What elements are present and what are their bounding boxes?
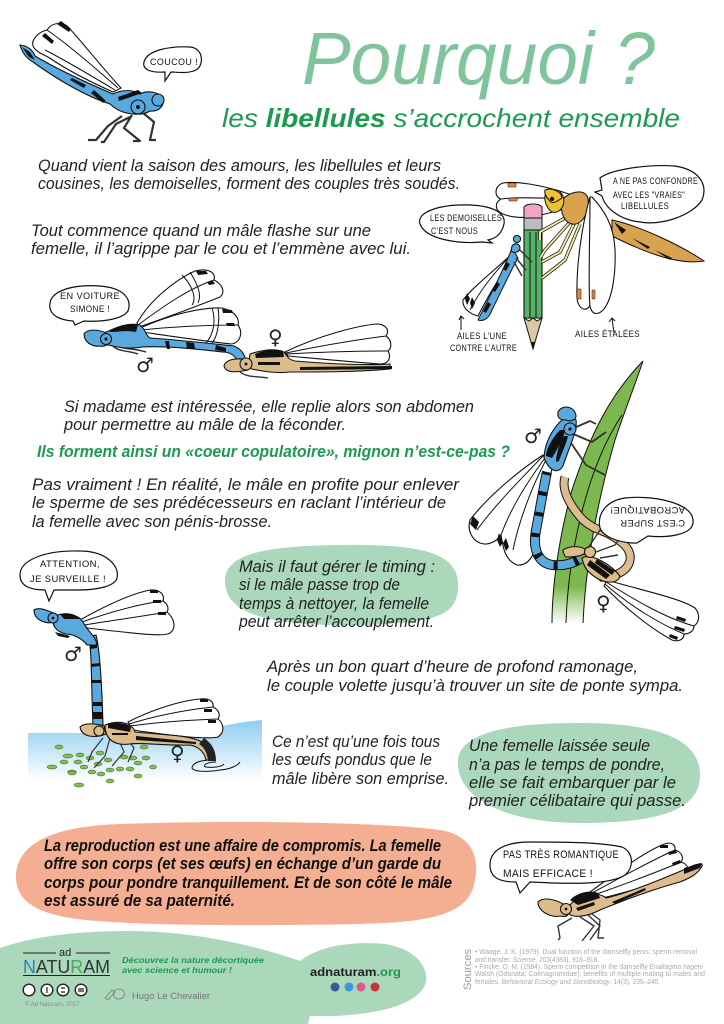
symbol: female: ♀	[596, 591, 611, 615]
green bubble: timing: si le mâle passe trop de	[239, 576, 400, 594]
label: ailes etalees	[575, 318, 640, 339]
speech bubble: vraies libellules: A NE PAS CONFONDRE	[613, 176, 698, 186]
tagline: Découvrez la nature décortiquée	[122, 955, 264, 965]
speech bubble: coucou: COUCOU !	[150, 57, 198, 67]
illustration: blue damselfly saying coucou	[20, 21, 201, 142]
green statement: Ils forment ainsi un «coeur copulatoire», mignon n’est-ce-pas ?	[37, 443, 510, 461]
title: Pourquoi ?	[302, 17, 655, 100]
text: female interested	[63, 398, 474, 434]
symbol: male: ♂	[64, 642, 82, 666]
orange conclusion panel: offre son corps (et ses œufs) en échange d’un garde du	[44, 855, 441, 873]
speech bubble: vraies libellules	[595, 166, 704, 223]
tagline: avec science et humour !	[122, 965, 232, 975]
female wings	[604, 580, 699, 641]
tagline	[122, 955, 264, 975]
licence icons	[23, 984, 87, 996]
speech bubble: pas tres romantique	[490, 842, 631, 893]
text: first encounter: Tout commence quand un mâle flashe sur une	[31, 222, 371, 240]
sources list: females. Behavioral Ecology and Sociobiology, 14(3), 235–240.	[475, 977, 660, 986]
text: eggs laid: mâle libère son emprise.	[272, 770, 449, 788]
speech bubble: pas tres romantique: PAS TRÈS ROMANTIQUE	[503, 848, 619, 861]
symbol: male: ♂	[524, 424, 542, 448]
pencil	[524, 204, 542, 349]
speech bubble: en voiture simone: EN VOITURE	[60, 291, 120, 301]
sources list: Walsh (Odonata: Coenagrionidae): benefits of multiple mating to males and	[475, 969, 705, 978]
male abdomen up	[88, 635, 103, 725]
text: eggs laid: Ce n’est qu’une fois tous	[272, 733, 440, 751]
text: quarter of an hour: le couple volette jusqu’à trouver un site de ponte sympa.	[267, 677, 683, 695]
intro text	[38, 157, 460, 193]
female wings	[128, 699, 223, 738]
green bubble: single female: premier célibataire qui passe.	[468, 792, 686, 810]
speech bubble upside down: super acrobatique: C’EST SUPER	[620, 518, 685, 528]
label: ailes l'une contre l'autre: CONTRE L’AUTRE	[450, 343, 517, 353]
orange conclusion panel: est assuré de sa paternité.	[44, 892, 235, 910]
sources list: • Waage, J. K. (1979). Dual function of the damselfly penis: sperm removal	[475, 947, 697, 956]
text: first encounter	[31, 222, 411, 258]
speech bubble upside down: super acrobatique: ACROBATIQUE!	[610, 505, 685, 515]
text: sperm removal: Pas vraiment ! En réalité, le mâle en profite pour enlever	[32, 476, 461, 494]
speech bubble: demoiselles: LES DEMOISELLES	[430, 213, 502, 223]
illustration: female dragonfly with speech bubble	[490, 842, 702, 941]
green bubble: timing: Mais il faut gérer le timing :	[239, 558, 435, 576]
speech bubble: attention: JE SURVEILLE !	[30, 574, 106, 584]
copyright: © Ad Naturam, 2017	[25, 1001, 80, 1008]
sources list: • Fincke, O. M. (1984). Sperm competition in the damselfly Enallagma hageni	[475, 962, 703, 971]
logo: ad naturam: ad	[59, 947, 71, 959]
text: sperm removal: la femelle avec son pénis-brosse.	[32, 513, 272, 531]
speech bubble: pas tres romantique: MAIS EFFICACE !	[503, 868, 593, 880]
male abdomen	[535, 472, 580, 565]
illustration: guarding male and laying female	[20, 551, 262, 787]
water	[28, 720, 262, 781]
text: quarter of an hour: Après un bon quart d’heure de profond ramonage,	[266, 658, 638, 676]
website: adnaturam .org	[310, 965, 401, 979]
symbol: male: ♂	[136, 353, 154, 377]
orange conclusion panel	[16, 822, 476, 925]
small blue damselfly	[463, 252, 515, 316]
text: quarter of an hour	[266, 658, 683, 695]
green bubble: single female: n’a pas le temps de pondre,	[469, 756, 665, 774]
logo: ad naturam: NATURAM	[23, 957, 110, 977]
speech bubble: en voiture simone	[50, 286, 129, 325]
speech bubble: demoiselles	[420, 205, 504, 243]
illustration: copulatory heart on a leaf	[469, 361, 699, 641]
speech bubble: en voiture simone: SIMONE !	[70, 304, 110, 314]
symbol: female: ♀	[268, 325, 283, 349]
text: sperm removal	[32, 476, 461, 531]
green bubble: single female: Une femelle laissée seule	[469, 737, 650, 755]
text: eggs laid	[272, 733, 449, 788]
male wings	[469, 455, 552, 565]
green bubble: timing	[225, 545, 458, 631]
text: first encounter: femelle, il l’agrippe par le cou et l’emmène avec lui.	[31, 240, 411, 258]
intro text: Quand vient la saison des amours, les libellules et leurs	[38, 157, 441, 175]
speech bubble: vraies libellules: AVEC LES "VRAIES"	[613, 190, 685, 200]
author credit: Hugo Le Chevalier	[132, 991, 210, 1001]
green bubble: timing: peut arrêter l’accouplement.	[238, 613, 434, 631]
intro text: cousines, les demoiselles, forment des couples très soudés.	[38, 175, 460, 193]
speech bubble: attention	[20, 551, 117, 601]
eggs	[47, 745, 156, 787]
speech bubble upside down: super acrobatique	[599, 497, 693, 543]
speech bubble: attention: ATTENTION,	[40, 559, 100, 569]
female body	[105, 722, 212, 760]
label: ailes etalees: AILES ÉTALÉES	[575, 329, 640, 339]
speech bubble: coucou	[144, 47, 201, 81]
male wings	[80, 590, 174, 635]
leaf	[552, 361, 643, 623]
ripples	[192, 760, 240, 771]
male thorax and head	[544, 415, 576, 471]
orange conclusion panel: La reproduction est une affaire de compromis. La femelle	[44, 837, 441, 855]
orange conclusion panel: corps pour pondre tranquillement. Et de son côté le mâle	[44, 874, 452, 892]
illustration: male carrying female by the neck	[84, 270, 246, 377]
sources heading: Sources	[462, 948, 474, 990]
green bubble: single female	[458, 723, 700, 823]
sources list: and transfer. Science, 203(4383), 916–918.	[475, 955, 599, 964]
footer background	[0, 931, 426, 1024]
text: sperm removal: le sperme de ses prédécesseurs en raclant l’intérieur de	[32, 494, 446, 512]
speech bubble: demoiselles: C’EST NOUS	[431, 226, 478, 236]
social icons	[330, 982, 380, 992]
female legs	[88, 736, 134, 768]
logo: ad naturam	[23, 947, 110, 977]
text: female interested: Si madame est intéressée, elle replie alors son abdomen	[64, 398, 474, 416]
author credit	[105, 989, 210, 1001]
legs yellow	[540, 218, 580, 278]
speech bubble: vraies libellules: LIBELLULES	[621, 201, 669, 211]
label: ailes l'une contre l'autre: AILES L’UNE	[457, 331, 507, 341]
sources list	[475, 947, 705, 986]
text: female interested: pour permettre au mâle de la féconder.	[63, 416, 346, 434]
dragonfly rear wings left	[496, 182, 572, 201]
male body	[53, 614, 97, 645]
text: eggs laid: les œufs pondus que le	[272, 751, 432, 769]
label: ailes l'une contre l'autre	[450, 316, 517, 353]
spread wings	[577, 197, 592, 309]
female abdomen and thorax	[564, 477, 630, 577]
illustration: female carried	[224, 324, 392, 378]
subtitle: les libellules s’accrochent ensemble	[222, 103, 680, 133]
illustration: pencil with damselfly and dragonfly	[463, 182, 704, 349]
dragonfly thorax and head	[561, 192, 588, 224]
symbol: female: ♀	[170, 741, 185, 765]
green bubble: timing: temps à nettoyer, la femelle	[239, 595, 429, 613]
dragonfly abdomen	[612, 220, 704, 262]
male legs	[569, 421, 606, 475]
green bubble: single female: elle se fait embarquer par le	[469, 774, 676, 792]
